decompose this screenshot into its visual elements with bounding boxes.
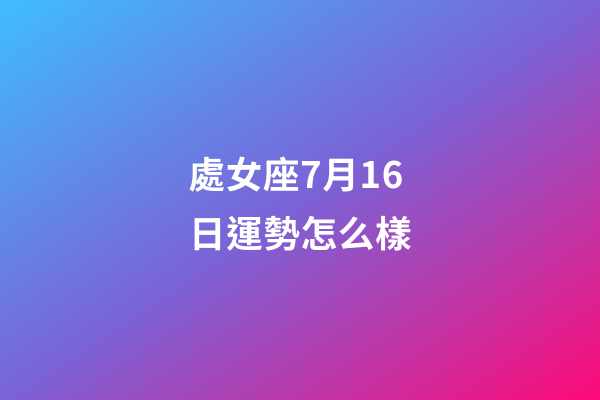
title line 2: 日運勢怎么樣 <box>189 205 412 258</box>
title line 1: 處女座7月16 <box>188 146 404 199</box>
